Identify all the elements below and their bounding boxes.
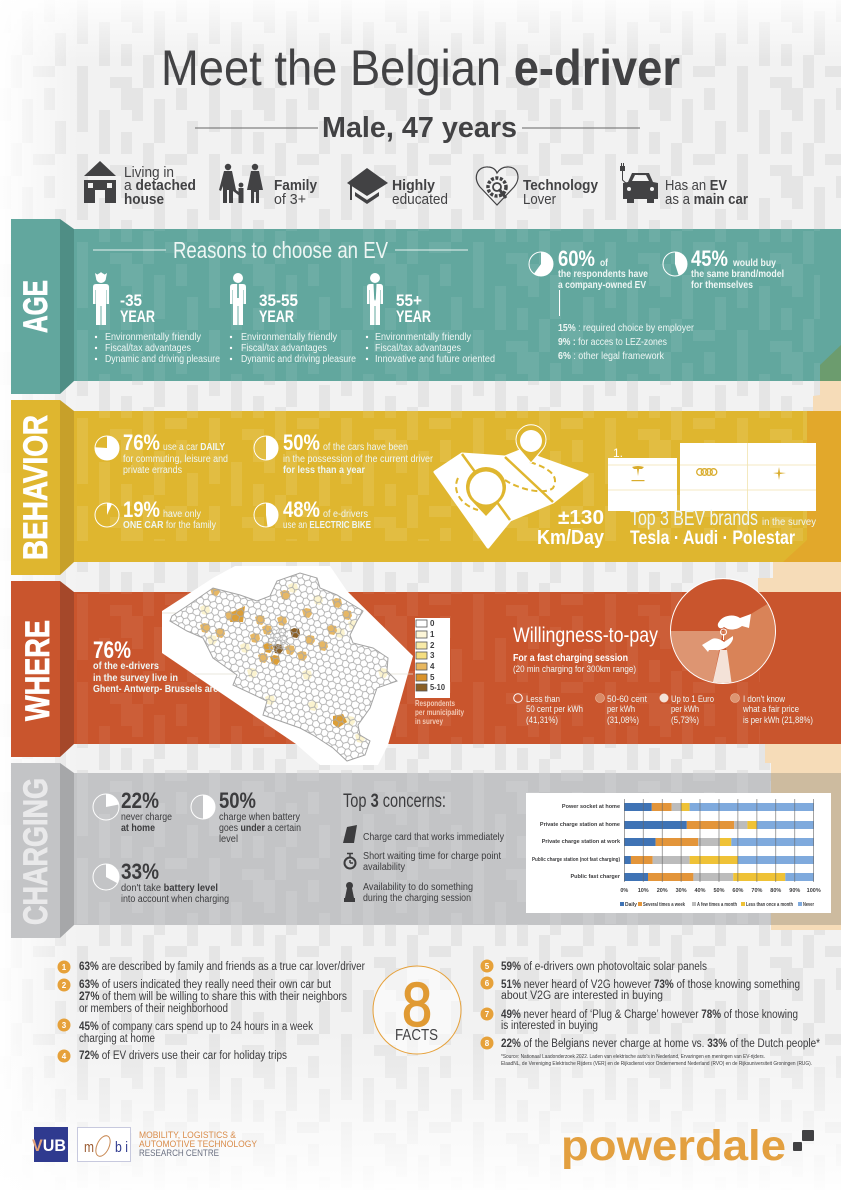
source note: [501, 1054, 812, 1067]
age group 35-55: [230, 273, 356, 365]
stat: possession: of the cars have been: [323, 442, 408, 453]
fact 7: is interested in buying: [501, 1020, 598, 1032]
map legend: 4: [430, 662, 435, 671]
text: education: Highly: [392, 178, 435, 194]
map legend: 2: [430, 641, 435, 650]
fact 2: 2: [62, 981, 67, 990]
stat: battery under level: goes under a certain: [219, 823, 301, 834]
map of Belgium: [160, 565, 413, 765]
map legend: in survey: [415, 717, 443, 726]
stat: region: in the survey live in: [93, 673, 178, 684]
map legend: per municipality: [415, 708, 464, 717]
stat: battery under level: charge when battery: [219, 812, 300, 823]
fact 7: [480, 1008, 798, 1032]
icon: chess pawn: [344, 882, 355, 902]
distance per day: ±130: [558, 507, 604, 529]
fact 3: charging at home: [79, 1033, 155, 1045]
row: power socket: [562, 803, 814, 811]
brand logos: 1.: [613, 446, 623, 460]
logo: tesla: [632, 466, 644, 481]
stat: possession: in the possession of the current driver: [283, 454, 434, 465]
age group under 35: -35: [120, 291, 142, 310]
x axis labels: 30%: [676, 888, 687, 894]
stat: battery under level: 50%: [219, 788, 256, 813]
age group 55 plus: 55+: [396, 291, 422, 310]
age group under 35: [93, 272, 220, 365]
fact 1: 1: [62, 963, 67, 972]
icon: map with pins: [435, 425, 587, 547]
title: Meet the Belgian e-driver: [161, 40, 680, 96]
text: family: [274, 178, 317, 208]
badge: 8 facts: FACTS: [395, 1027, 438, 1044]
map legend: 5-10: [430, 683, 446, 692]
row: public station: Public charge station (not fast charging): [532, 857, 620, 863]
panel: age: [11, 219, 841, 394]
stat: never at home: [93, 788, 172, 834]
row: power socket: Power socket at home: [562, 804, 620, 810]
mobi research centre text: AUTOMOTIVE TECHNOLOGY: [139, 1139, 257, 1149]
logo: powerdale: powerdale: [561, 1122, 786, 1170]
chart legend: A few times a month: [697, 902, 737, 908]
mobi research centre text: [139, 1130, 257, 1158]
stat: electric bike: [254, 497, 371, 531]
x axis labels: 10%: [638, 888, 649, 894]
text: house: a detached: [124, 178, 196, 194]
x axis labels: 0%: [620, 888, 628, 894]
map legend: 1: [430, 630, 435, 639]
stat: one car: have only: [163, 509, 201, 520]
fact 3: 3: [62, 1021, 67, 1030]
fact 6: [480, 976, 800, 1002]
logo: mobi: m: [84, 1139, 94, 1156]
stat: same brand: the same brand/model: [691, 269, 784, 280]
legend: up to 1 euro: Up to 1 Euro: [671, 694, 714, 705]
top concerns: availability: [363, 862, 405, 873]
stat: company-owned EV: a company-owned EV: [558, 280, 646, 291]
age group 55 plus: YEAR: [396, 307, 431, 326]
age group under 35: Environmentally friendly: [105, 332, 201, 343]
legend: under 50 cent: 50 cent per kWh: [526, 704, 583, 715]
fact 5: 59% of e-drivers own photovoltaic solar panels: [501, 961, 707, 973]
willingness to pay: (20 min charging for 300km range): [513, 664, 636, 675]
fact 7: 7: [485, 1010, 490, 1019]
fact 5: 5: [485, 962, 490, 971]
text: main car: [665, 178, 748, 208]
pie chart with hands: [670, 578, 776, 684]
age group 35-55: Environmentally friendly: [241, 332, 337, 343]
logo: polestar: [773, 467, 786, 480]
willingness to pay: Willingness-to-pay: [513, 624, 658, 647]
fact 3: 45% of company cars spend up to 24 hours in a week: [79, 1021, 313, 1033]
stat: possession: 50%: [283, 430, 320, 455]
fact 2: 27% of them will be willing to share this with their neighbors: [79, 991, 347, 1003]
top concerns: Charge card that works immediately: [363, 832, 504, 843]
text: technology: Lover: [523, 192, 556, 208]
top concerns: Top 3 concerns:: [343, 791, 446, 812]
text: education: [392, 178, 448, 208]
stat: same brand: for themselves: [691, 280, 753, 291]
stat: region: 76%: [93, 637, 131, 664]
brands caption: Top 3 BEV brands: [630, 507, 758, 530]
fact 7: 49% never heard of ‘Plug & Charge’ however 78% of those knowing: [501, 1009, 798, 1021]
mobi research centre text: RESEARCH CENTRE: [139, 1148, 219, 1158]
legend: 50-60 cent: (31,08%): [607, 715, 639, 726]
age group 35-55: Fiscal/tax advantages: [241, 343, 327, 354]
row: public fast charger: [570, 873, 814, 881]
logo: audi: [697, 469, 717, 475]
stat: region: Ghent- Antwerp- Brussels area: [93, 684, 223, 695]
fact 2: 63% of users indicated they really need their own car but: [79, 979, 332, 991]
legend: 50-60 cent: per kWh: [607, 704, 635, 715]
subtitle: Male, 47 years: [322, 112, 517, 144]
fact 2: [58, 978, 347, 1015]
heading: reasons: Reasons to choose an EV: [173, 237, 389, 263]
stat: company-owned EV: 9% : for acces to LEZ-zones: [558, 337, 667, 348]
age group under 35: Fiscal/tax advantages: [105, 343, 191, 354]
x axis labels: 90%: [789, 888, 800, 894]
icon: hands with coin: [702, 614, 751, 652]
legend: under 50 cent: [514, 694, 583, 726]
badge: 8 facts: 8: [402, 971, 432, 1040]
fact 4: 4: [62, 1052, 67, 1061]
age group 35-55: 35-55: [259, 291, 298, 310]
text: main car: Has an EV: [665, 178, 727, 194]
row: private station home: Private charge station at home: [540, 822, 620, 828]
legend: under 50 cent: (41,31%): [526, 715, 558, 726]
stat: company-owned EV: 6% : other legal framework: [558, 351, 665, 362]
icon: technology heart: [476, 167, 518, 205]
map legend: [415, 618, 464, 726]
fact 8: 22% of the Belgians never charge at home vs. 33% of the Dutch people*: [501, 1038, 820, 1050]
stat: one car: [95, 497, 216, 531]
legend: don't know: is per kWh (21,88%): [743, 715, 813, 726]
stat: battery level ignored: into account when charging: [121, 894, 229, 905]
logo: VUB: VUB: [32, 1136, 66, 1155]
text: family: Family: [274, 178, 317, 194]
text: technology: [523, 178, 598, 208]
fact 3: [58, 1018, 313, 1045]
legend: up to 1 euro: per kWh: [671, 704, 699, 715]
tab label: charging: CHARGING: [17, 778, 55, 925]
icon: house: [84, 161, 116, 203]
panel: where: [11, 565, 841, 765]
stat: same brand: would buy: [732, 257, 776, 269]
age group 35-55: Dynamic and driving pleasure: [241, 354, 356, 365]
legend: up to 1 euro: [660, 694, 714, 726]
icon: charge card: [343, 825, 357, 843]
brands caption: [630, 507, 816, 549]
stat: electric bike: of e-drivers: [323, 509, 368, 520]
legend: 50-60 cent: 50-60 cent: [607, 694, 647, 705]
age group under 35: YEAR: [120, 307, 155, 326]
facts left column: [58, 960, 365, 1062]
stat: one car: ONE CAR for the family: [123, 520, 216, 531]
text: house: Living in: [124, 165, 174, 181]
stat: electric bike: use an ELECTRIC BIKE: [283, 520, 371, 531]
top concerns: Availability to do something: [363, 882, 473, 893]
panel: behavior: [11, 400, 841, 575]
chart legend: Several times a week: [643, 902, 685, 908]
legend: 50-60 cent: [596, 694, 647, 726]
facts right column: [480, 960, 820, 1067]
distance per day: Km/Day: [537, 527, 605, 549]
stat: battery under level: level: [219, 834, 238, 845]
tab label: behavior: BEHAVIOR: [17, 415, 55, 560]
fact 4: 72% of EV drivers use their car for holiday trips: [79, 1050, 287, 1062]
legend: under 50 cent: Less than: [526, 694, 560, 705]
profile row: [84, 161, 748, 208]
legend: up to 1 euro: (5,73%): [671, 715, 699, 726]
x axis labels: [620, 888, 821, 894]
row: public station: [532, 856, 814, 864]
top concerns: Short waiting time for charge point: [363, 851, 501, 862]
icon: graduation cap: [347, 168, 388, 204]
stat: daily use: 76%: [123, 430, 160, 455]
distance per day: [537, 507, 605, 549]
stat: company-owned EV: 15% : required choice by employer: [558, 323, 695, 334]
willingness to pay: For a fast charging session: [513, 653, 628, 664]
row: private station work: [542, 838, 814, 846]
stat: battery under level: [191, 788, 301, 845]
stat: possession: for less than a year: [283, 465, 365, 476]
stat: region: [93, 637, 223, 695]
row: public fast charger: Public fast charger: [570, 874, 621, 880]
top concerns: during the charging session: [363, 893, 471, 904]
logo: VUB: [32, 1127, 68, 1162]
source note: *Source: Nationaal Laadonderzoek 2022. Laden van elektrische auto's in Nederland, Ervaringen en meningen van EV-rijders.: [501, 1054, 765, 1060]
stat: company-owned EV: 60%: [558, 246, 595, 271]
stat: daily use: private errands: [123, 465, 182, 476]
stat: daily use: use a car DAILY: [163, 442, 225, 453]
logo: mobi: [78, 1128, 130, 1162]
panel: charging: [11, 763, 841, 938]
stat: company-owned EV: of: [600, 257, 608, 269]
brand logos: [608, 443, 816, 511]
age group 35-55: YEAR: [259, 307, 294, 326]
age group 55 plus: Innovative and future oriented: [375, 354, 495, 365]
source note: ElaadNL, de Vereniging Elektrische Rijders (VER) en de Rijksdienst voor Ondernemend Nederland (RVO) en de Rijksuniversiteit Groningen (RUG).: [501, 1061, 812, 1067]
x axis labels: 70%: [751, 888, 763, 894]
age group under 35: Dynamic and driving pleasure: [105, 354, 220, 365]
fact 6: 6: [485, 979, 490, 988]
row: private station work: Private charge station at work: [542, 839, 621, 845]
stat: never at home: 22%: [121, 788, 159, 813]
map legend: 3: [430, 651, 435, 660]
map legend: 5: [430, 673, 435, 682]
logo: mobi: b i: [115, 1139, 128, 1156]
badge: 8 facts: [373, 966, 461, 1054]
stat: daily use: for commuting, leisure and: [123, 454, 228, 465]
stat: never at home: never charge: [121, 812, 172, 823]
text: house: house: [124, 192, 164, 208]
tab label: where: WHERE: [19, 620, 57, 721]
brands caption: Tesla · Audi · Polestar: [630, 528, 796, 549]
text: family: of 3+: [274, 192, 306, 208]
fact 6: about V2G are interested in buying: [501, 990, 663, 1002]
age group 55 plus: Environmentally friendly: [375, 332, 471, 343]
fact 6: 51% never heard of V2G however 73% of those knowing something: [501, 979, 800, 991]
brands caption: in the survey: [762, 517, 816, 528]
icon: stopwatch: [344, 853, 356, 868]
chart legend: Daily: [625, 902, 637, 908]
stat: one car: 19%: [123, 497, 160, 522]
willingness to pay: [513, 578, 813, 726]
x axis labels: 60%: [732, 888, 744, 894]
x axis labels: 50%: [713, 888, 725, 894]
chart legend: Never: [803, 902, 814, 908]
stat: daily use: [95, 430, 228, 476]
legend: don't know: I don't know: [743, 694, 785, 705]
x axis labels: 80%: [770, 888, 781, 894]
chart legend: Less than once a month: [746, 902, 793, 908]
stat: possession: [254, 430, 434, 476]
stat: company-owned EV: the respondents have: [558, 269, 648, 280]
stat: company-owned EV: [529, 246, 695, 362]
stat: same brand: [663, 246, 784, 291]
text: technology: Technology: [523, 178, 598, 194]
stat: electric bike: 48%: [283, 497, 320, 522]
text: house: [124, 165, 196, 208]
map legend: 0: [430, 619, 435, 628]
fact 2: or members of their neighborhood: [79, 1003, 228, 1015]
text: main car: as a main car: [665, 192, 748, 208]
age group 55 plus: Fiscal/tax advantages: [375, 343, 461, 354]
map legend: Respondents: [415, 699, 455, 708]
fact 8: 8: [485, 1039, 490, 1048]
stat: same brand: 45%: [691, 246, 728, 271]
text: education: educated: [392, 192, 448, 208]
icon: family: [219, 164, 263, 203]
mobi research centre text: MOBILITY, LOGISTICS &: [139, 1130, 236, 1140]
chart legend: [620, 902, 814, 908]
top concerns: [343, 791, 504, 904]
age group 55 plus: [366, 273, 495, 365]
stat: never at home: at home: [121, 823, 155, 834]
stat: battery level ignored: don't take battery level: [121, 883, 218, 894]
icon: electric car: [620, 163, 658, 203]
x axis labels: 40%: [694, 888, 706, 894]
stat: battery level ignored: [93, 859, 229, 905]
tab label: age: AGE: [17, 280, 55, 333]
stat: battery level ignored: 33%: [121, 859, 159, 884]
legend: don't know: what a fair price: [742, 704, 799, 715]
x axis labels: 20%: [657, 888, 668, 894]
row: private station home: [540, 821, 814, 829]
stacked bar chart: [526, 793, 831, 913]
legend: don't know: [730, 694, 813, 726]
fact 1: 63% are described by family and friends as a true car lover/driver: [79, 961, 365, 973]
stat: region: of the e-drivers: [93, 661, 159, 672]
x axis labels: 100%: [807, 888, 821, 894]
